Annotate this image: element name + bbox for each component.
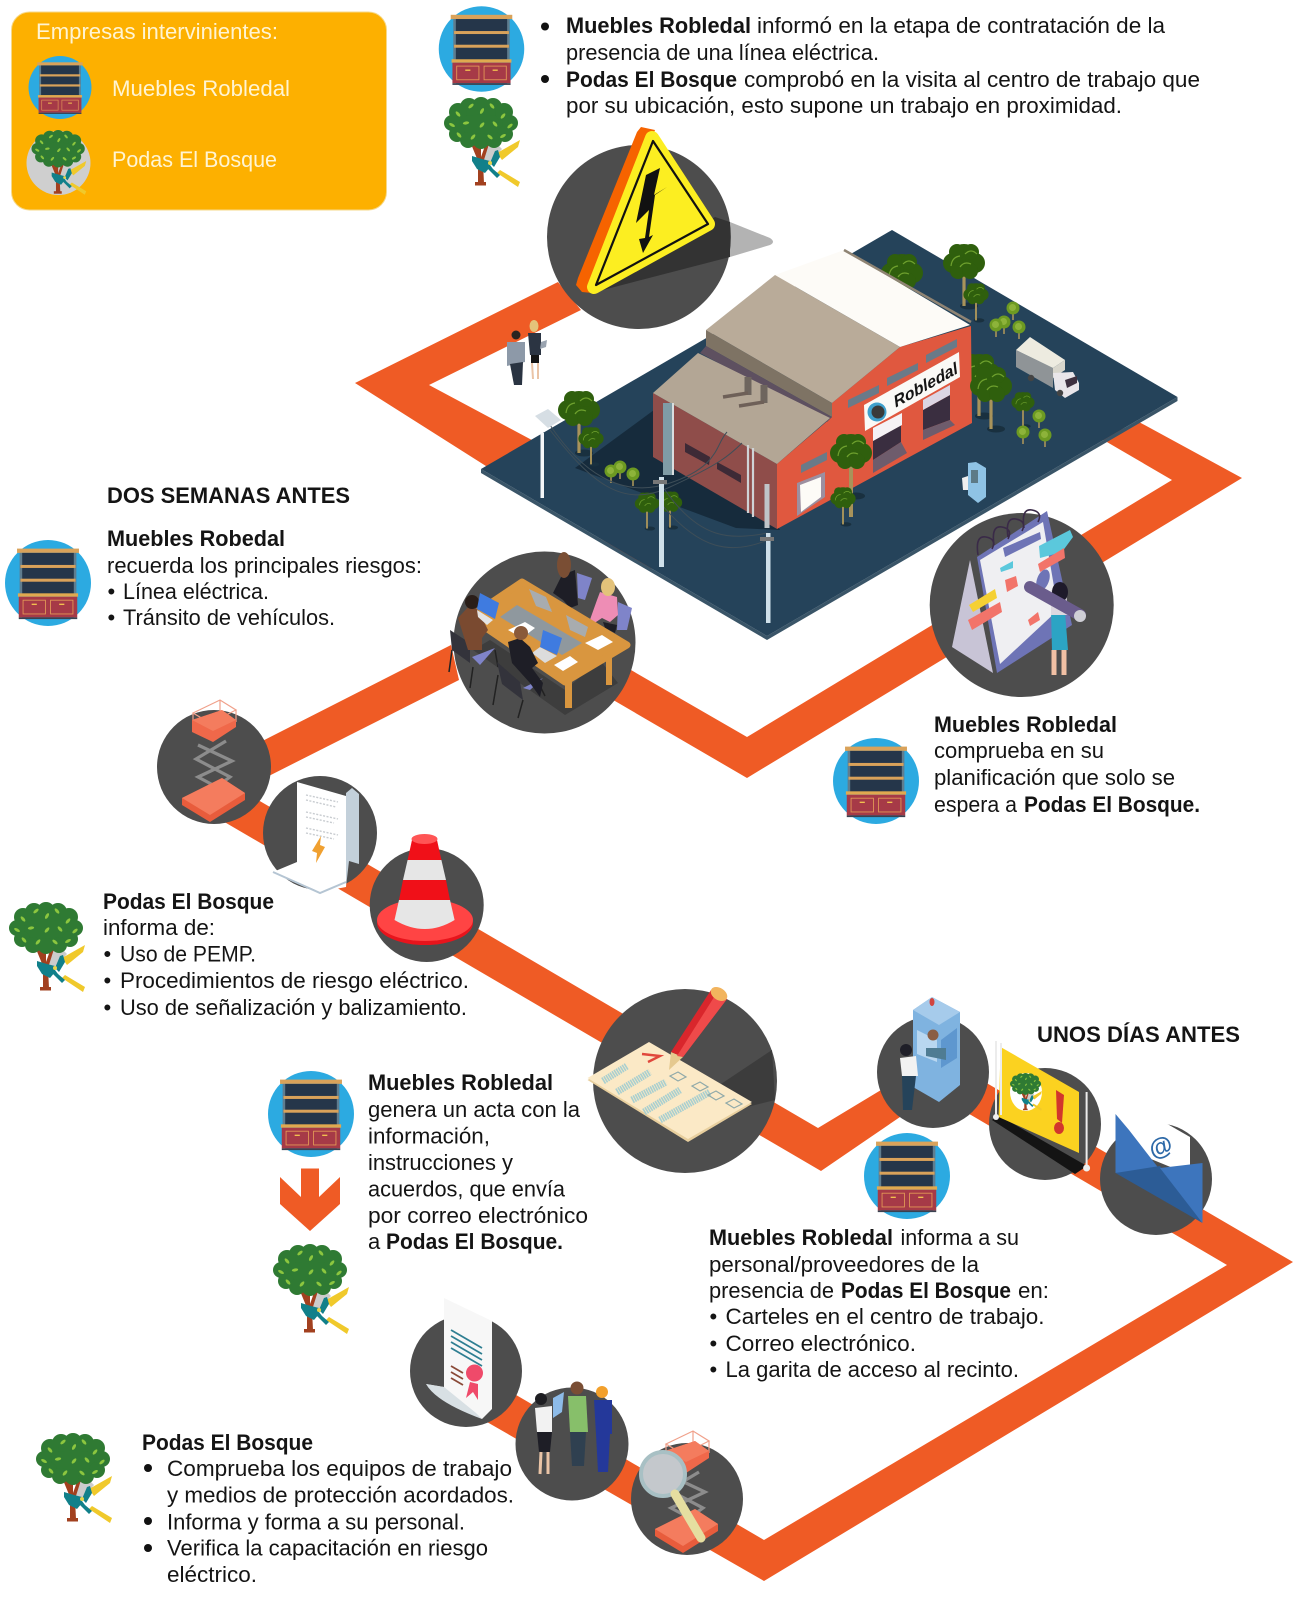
text block: minutes by email: Podas El Bosque. [386,1229,563,1254]
icon: furniture shelf top [439,6,524,92]
text block: minutes by email: genera un acta con la [368,1097,581,1122]
icon: electrical procedure document [263,776,377,893]
people: managers [507,320,547,385]
text block: planning check: espera a [934,792,1018,817]
power lines and poles [535,409,774,623]
orange process ribbon [168,282,1293,1581]
text block: informs of: • [104,968,111,993]
text block: minutes by email: a [368,1229,381,1254]
text block: informs of: Uso de señalización y balizamiento. [120,995,467,1020]
truck [1016,337,1079,398]
text block: informs staff [709,1225,1049,1382]
text block: planning check [934,712,1200,817]
text block: informs staff: La garita de acceso al recinto. [726,1357,1019,1382]
building shadow [575,400,780,530]
icon: warning billboard [989,1041,1101,1180]
heading: two weeks before: DOS SEMANAS ANTES [107,483,350,508]
text block: informs staff: Carteles en el centro de trabajo. [726,1304,1044,1329]
icon: certificate [410,1298,522,1427]
icon: three workers [516,1382,628,1500]
text block: informs of [103,889,469,1020]
icon: traffic cone [370,834,484,962]
text block: informs of: • [104,942,111,966]
text block: informs staff: presencia de [709,1278,834,1303]
text block: informs staff: Podas El Bosque [841,1278,1011,1303]
icon: scissor lift [157,700,271,824]
icon: inspected lift with magnifier [631,1431,743,1555]
text block: informs of: Podas El Bosque [103,889,274,914]
icon: tree top [444,97,520,187]
text block: pruning company checks: Verifica la capacitación en riesgo [167,1536,488,1560]
text block: minutes by email: instrucciones y [368,1150,513,1175]
icon: meeting around a table [449,552,636,734]
icon: checklist and pencil [588,984,777,1173]
text block: informs of: informa de: [103,915,215,940]
text block: minutes by email: Muebles Robledal [368,1070,553,1095]
text block: pruning company checks [142,1430,514,1587]
text block: main risks: recuerda los principales riesgos: [107,553,422,578]
icon: furniture shelf [864,1133,950,1219]
text block: contract stage: comprobó en la visita al centro de trabajo que [744,67,1200,92]
text block: planning check: comprueba en su [934,738,1104,763]
text block: contract stage: Muebles Robledal [566,13,751,38]
icon: furniture shelf [28,56,92,119]
text block: informs staff: en: [1018,1278,1049,1303]
text block: minutes by email [368,1070,588,1254]
text block: informs staff: Correo electrónico. [726,1331,916,1356]
text block: minutes by email: acuerdos, que envía [368,1176,566,1202]
text block: pruning company checks: y medios de protección acordados. [167,1482,514,1508]
arrow: down from furniture company to pruning company [280,1168,340,1231]
text block: main risks: Línea eléctrica. [123,579,269,604]
text block: planning check: Podas El Bosque. [1024,792,1200,817]
icon: tree [36,1433,112,1523]
text block: informs staff: informa a su [900,1225,1019,1250]
text block: contract stage: por su ubicación, esto supone un trabajo en proximidad. [566,93,1122,118]
panel: legend of companies [12,12,386,210]
text block: main risks: • [108,605,115,630]
icon: tree with pruners [26,130,90,195]
text block: contract stage: Podas El Bosque [566,67,737,92]
icon: furniture shelf [833,738,919,824]
text block: main risks: • [108,579,115,604]
icon: email envelope [1100,1102,1212,1235]
legend label: Muebles Robledal: Muebles Robledal [112,76,290,101]
icon: tree [273,1244,349,1334]
text block: minutes by email: por correo electrónico [368,1203,588,1228]
text block: pruning company checks: eléctrico. [167,1562,257,1587]
icon: tree [9,902,85,992]
text block: informs of: Procedimientos de riesgo eléctrico. [120,968,469,993]
label: Robledal sign text: Robledal [893,358,958,412]
icon: email envelope: @ [1145,1130,1177,1164]
text block: main risks [107,526,422,630]
text block: informs staff: personal/proveedores de la [709,1252,980,1277]
icon: furniture shelf [268,1071,354,1157]
text block: informs of: • [104,995,111,1020]
icon: furniture shelf [5,540,91,626]
text block: pruning company checks: Informa y forma a su personal. [167,1510,465,1534]
icon: guard booth [877,997,989,1128]
text block: informs staff: Muebles Robledal [709,1225,893,1250]
text block: minutes by email: información, [368,1124,490,1148]
text block: informs staff: • [710,1331,717,1356]
text block: contract stage: presencia de una línea eléctrica. [566,40,879,65]
text block: informs staff: • [710,1304,717,1329]
text block: informs of: Uso de PEMP. [120,942,256,966]
factory building [653,250,972,529]
icon: planning calendar [930,510,1114,697]
heading: a few days before: UNOS DÍAS ANTES [1037,1022,1240,1047]
text block: informs staff: • [710,1357,717,1382]
security booth small [962,462,986,505]
text block: planning check: planificación que solo se [934,765,1175,790]
text block: pruning company checks: Podas El Bosque [142,1430,313,1455]
text block: contract stage [541,13,1200,118]
legend label: Podas El Bosque: Podas El Bosque [112,147,277,172]
platform with factory [481,230,1178,640]
text block: main risks: Muebles Robedal [107,526,285,551]
text block: pruning company checks: Comprueba los equipos de trabajo [167,1456,512,1481]
text block: contract stage: informó en la etapa de contratación de la [757,13,1166,38]
legend title: Empresas intervinientes: [36,19,278,44]
text block: planning check: Muebles Robledal [934,712,1117,737]
icon: electrical hazard sign [547,127,773,329]
text block: main risks: Tránsito de vehículos. [123,605,335,630]
